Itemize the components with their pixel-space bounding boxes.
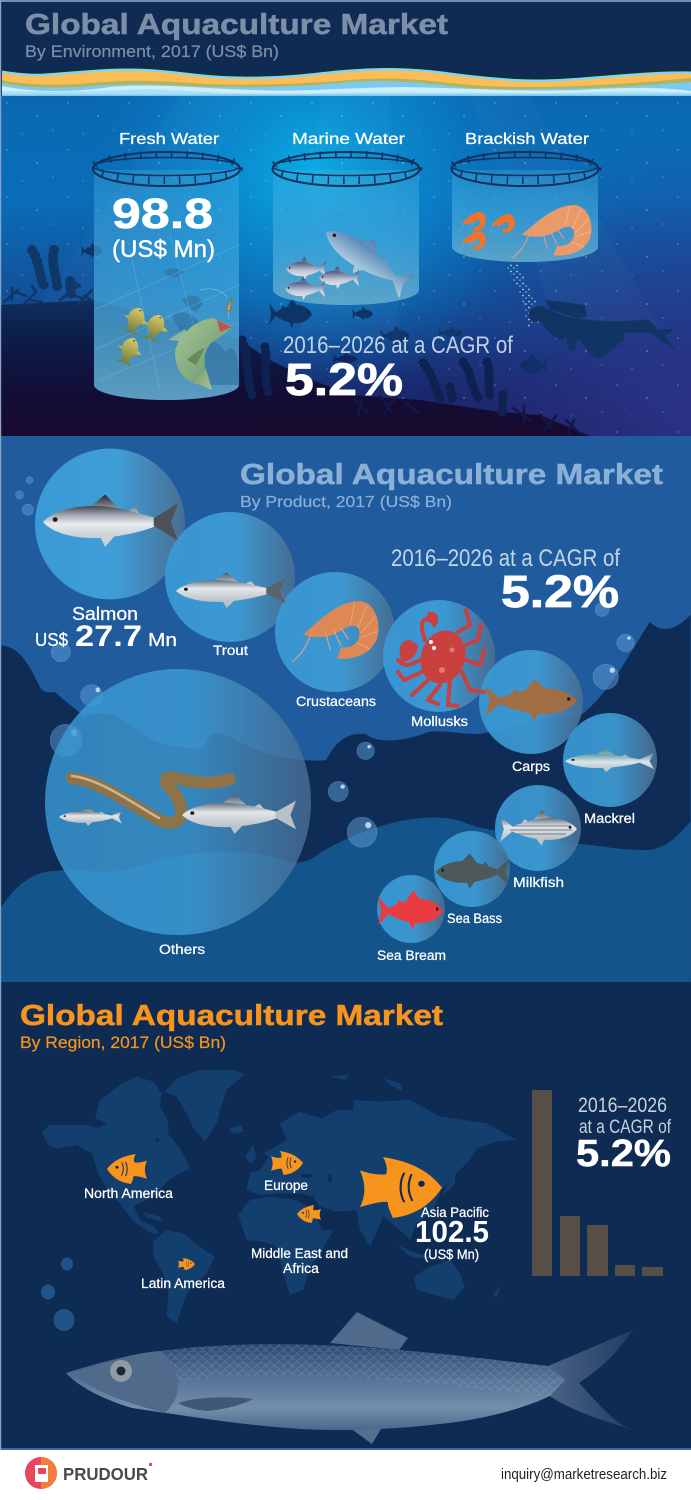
label: Salmon value bbox=[35, 604, 177, 653]
heading: environment: By Environment, 2017 (US$ Bn) bbox=[25, 42, 279, 61]
fish: milkfish bbox=[500, 810, 577, 846]
panel: product bbox=[0, 436, 691, 986]
heading: product: Global Aquaculture Market bbox=[240, 459, 663, 491]
label: Salmon value: 27.7 bbox=[75, 620, 142, 653]
label: Trout: Trout bbox=[213, 643, 248, 658]
fish: large sardine bbox=[182, 794, 296, 834]
label: Marine Water: Marine Water bbox=[292, 131, 406, 148]
crab: mollusks bbox=[398, 610, 484, 706]
fish icon: Asia Pacific bbox=[360, 1157, 442, 1218]
fish: small anchovy bbox=[59, 807, 122, 826]
label: Asia Pacific value: 102.5 bbox=[415, 1214, 489, 1249]
heading: environment bbox=[25, 9, 448, 61]
label: Middle East and Africa: Africa bbox=[283, 1261, 320, 1276]
contact email: inquiry@marketresearch.biz bbox=[501, 1466, 667, 1483]
fish: large herring bbox=[66, 1312, 634, 1444]
CAGR: product bbox=[391, 545, 620, 617]
scuba diver bbox=[528, 300, 678, 358]
CAGR: environment bbox=[283, 332, 513, 405]
cage: marine water bbox=[272, 152, 420, 305]
bubble: mackrel bbox=[563, 713, 657, 807]
air bubbles bbox=[505, 263, 545, 328]
bubble: sea bass bbox=[434, 831, 510, 907]
fish: mackerel bbox=[565, 749, 654, 772]
label: Carps: Carps bbox=[512, 759, 550, 774]
footer bbox=[0, 1450, 691, 1500]
bubble: others bbox=[45, 669, 311, 935]
CAGR: region: at a CAGR of bbox=[579, 1117, 672, 1138]
label: Europe: Europe bbox=[264, 1178, 308, 1193]
label: Asia Pacific value: Asia Pacific bbox=[421, 1205, 489, 1220]
label: Fresh Water: Fresh Water bbox=[119, 131, 220, 148]
label: Asia Pacific value bbox=[415, 1205, 489, 1262]
fish: trout bbox=[176, 572, 286, 608]
value: 98.8 bbox=[112, 190, 215, 263]
bubble: trout bbox=[165, 512, 295, 642]
fish: small cod school bbox=[285, 257, 359, 300]
label: Latin America: Latin America bbox=[141, 1276, 225, 1291]
fish: small bass bbox=[112, 303, 173, 369]
label: Middle East and Africa bbox=[251, 1246, 348, 1276]
small bubbles bbox=[15, 477, 634, 847]
bubble: salmon bbox=[35, 448, 185, 600]
fish: eel bbox=[72, 776, 230, 823]
cage: brackish water bbox=[452, 152, 598, 262]
cage: fresh water bbox=[93, 152, 240, 400]
value: 98.8: 98.8 bbox=[112, 190, 213, 238]
shrimp: small group bbox=[459, 212, 515, 251]
label: Mackrel: Mackrel bbox=[584, 811, 635, 826]
label: Crustaceans: Crustaceans bbox=[296, 694, 376, 709]
CAGR: product: 5.2% bbox=[501, 566, 619, 617]
label: Salmon value: Mn bbox=[148, 630, 177, 650]
heading: region: Global Aquaculture Market bbox=[20, 1000, 443, 1032]
fish: sea bass bbox=[436, 853, 509, 889]
shrimp: crustaceans bbox=[292, 601, 379, 662]
panel: region bbox=[0, 982, 691, 1450]
heading: region bbox=[20, 1000, 443, 1052]
heading: environment: Global Aquaculture Market bbox=[25, 9, 448, 41]
bar chart bbox=[532, 1090, 663, 1276]
label: Mollusks: Mollusks bbox=[411, 714, 468, 729]
label: Others: Others bbox=[159, 942, 205, 957]
heading: product bbox=[240, 459, 663, 511]
label: Milkfish: Milkfish bbox=[513, 875, 564, 890]
bubble: carps bbox=[479, 650, 583, 754]
fish: carp bbox=[485, 679, 577, 721]
label: Salmon value: US$ bbox=[35, 630, 68, 650]
bubble: sea bream bbox=[377, 875, 445, 943]
heading: product: By Product, 2017 (US$ Bn) bbox=[240, 494, 452, 511]
label: Middle East and Africa: Middle East and bbox=[251, 1246, 348, 1261]
CAGR: region: 5.2% bbox=[576, 1133, 671, 1175]
seabed reef silhouettes bbox=[0, 250, 590, 436]
label: Sea Bass: Sea Bass bbox=[447, 911, 502, 926]
heading: region: By Region, 2017 (US$ Bn) bbox=[20, 1033, 226, 1052]
label: Asia Pacific value: (US$ Mn) bbox=[424, 1247, 479, 1262]
bubble: mollusks bbox=[383, 600, 495, 712]
bubble: milkfish bbox=[495, 785, 581, 871]
value: 98.8: (US$ Mn) bbox=[112, 236, 215, 263]
panel: environment bbox=[0, 0, 691, 436]
fish: sea bream bbox=[378, 890, 443, 930]
logo: Prudour: PRUDOUR bbox=[63, 1464, 148, 1484]
fish icon: Latin America bbox=[178, 1258, 195, 1270]
fish icon: North America bbox=[107, 1154, 147, 1184]
CAGR: region bbox=[576, 1094, 672, 1175]
wave band bbox=[2, 66, 691, 96]
bubble: crustaceans bbox=[275, 572, 395, 692]
label: Salmon value: Salmon bbox=[72, 604, 138, 624]
label: North America: North America bbox=[84, 1186, 174, 1201]
CAGR: environment: 2016–2026 at a CAGR of bbox=[283, 332, 513, 359]
background waves bbox=[0, 615, 691, 986]
CAGR: product: 2016–2026 at a CAGR of bbox=[391, 545, 620, 572]
logo: Prudour bbox=[25, 1457, 152, 1489]
fish icon: Europe bbox=[271, 1151, 303, 1175]
label: Brackish Water: Brackish Water bbox=[465, 131, 590, 148]
label: Sea Bream: Sea Bream bbox=[377, 948, 446, 963]
fish: salmon bbox=[43, 494, 178, 547]
shrimp: large bbox=[512, 205, 592, 258]
world map bbox=[42, 1070, 517, 1323]
CAGR: environment: 5.2% bbox=[285, 354, 403, 405]
silhouette fish bbox=[81, 243, 548, 378]
fish: large bass with lure bbox=[168, 289, 232, 390]
fish icon: Middle East and Africa bbox=[297, 1205, 321, 1223]
bubbles: region bbox=[41, 1258, 74, 1331]
fish: large cod bbox=[315, 215, 419, 303]
CAGR: region: 2016–2026 bbox=[578, 1094, 667, 1117]
